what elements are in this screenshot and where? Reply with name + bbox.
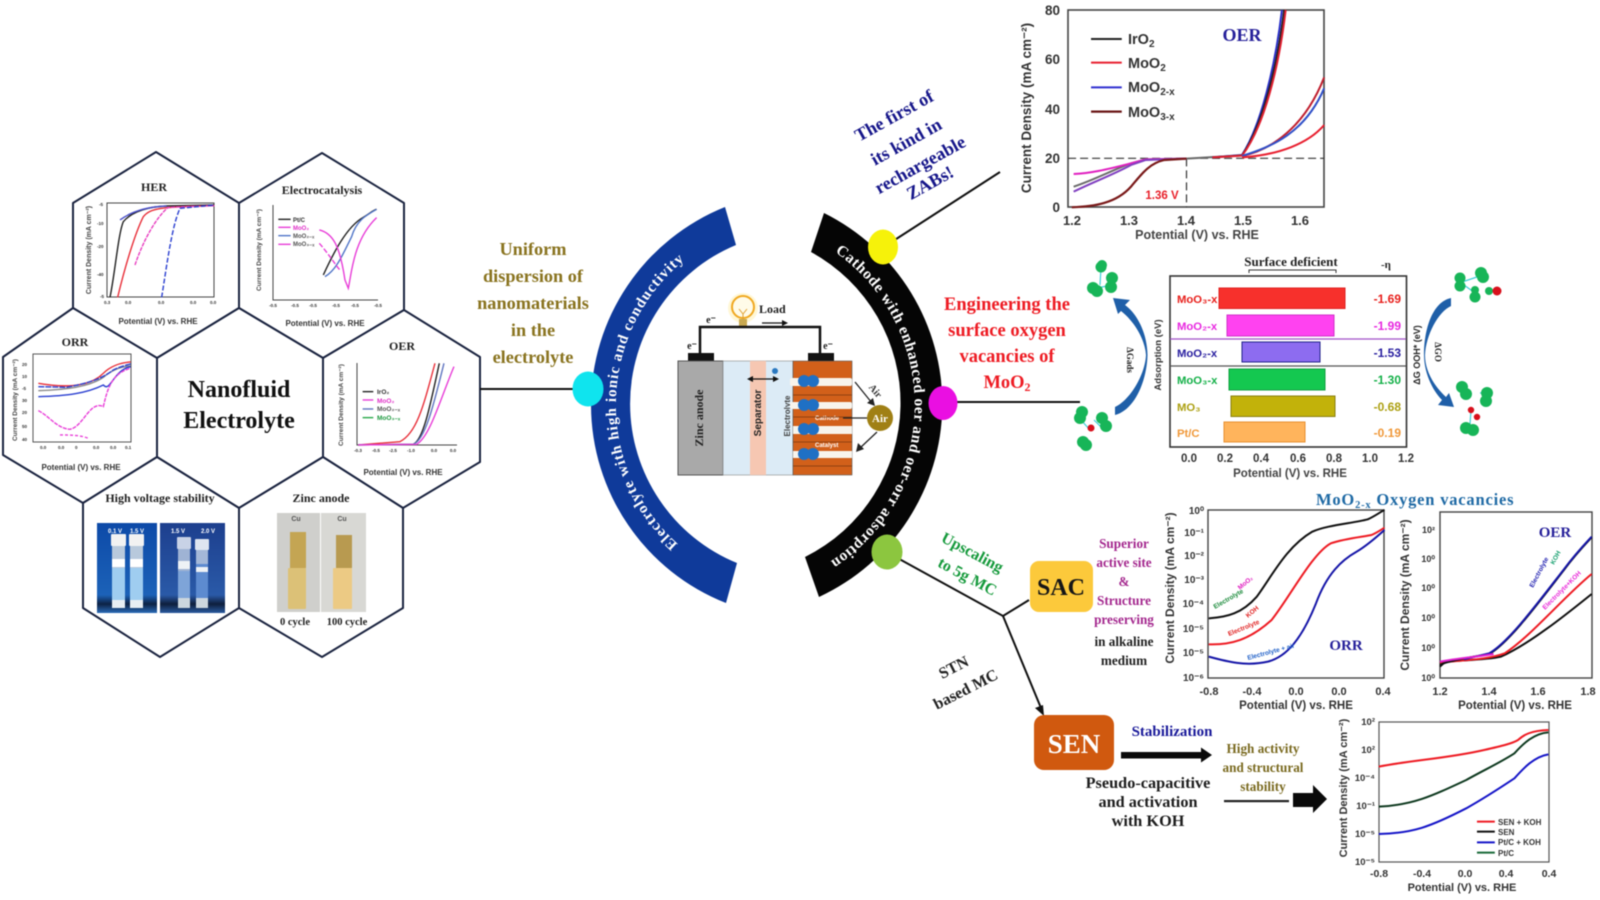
chart: OER main: 1.3 (1120, 213, 1138, 228)
chart: OER main: 1.36 V (1145, 190, 1179, 202)
text: pseudo-capacitive: with KOH (1112, 811, 1185, 830)
chart: SEN polarization: Potential (V) vs. RHE (1408, 882, 1516, 894)
hexagon: OER chart: MoO₃₋ₓ (377, 415, 401, 422)
hexagon: Zinc anode photos (277, 491, 368, 628)
chart: adsorption bar chart: 0.8 (1326, 453, 1343, 465)
hexagon: High voltage stability photos: 1.5 V (171, 529, 185, 535)
arrow: blue curved left (1113, 298, 1148, 415)
text: engineering surface oxygen vacancies: MoO (983, 373, 1025, 393)
text: engineering surface oxygen vacancies: 2 (1025, 380, 1031, 394)
legend: 2-x (1160, 87, 1175, 98)
text: pseudo-capacitive: Pseudo-capacitive (1086, 773, 1210, 792)
hexagon: OER chart: MoO₂ (377, 398, 394, 405)
text: pseudo-capacitive: and activation (1098, 792, 1198, 811)
chart: adsorption bar chart: Potential (V) vs. RHE (1233, 468, 1347, 480)
legend: Pt/C (1498, 849, 1514, 858)
hexagon: OER chart: Potential (V) vs. RHE (363, 468, 443, 477)
hexagon: High voltage stability photos: High voltage stability (105, 491, 215, 505)
legend: Pt/C + KOH (1498, 838, 1541, 847)
chart: OER main: OER (1222, 25, 1262, 45)
hexagon: OER chart: 0.0 (450, 448, 457, 453)
external circuit wire (700, 327, 820, 353)
arrow: SEN to high activity (1121, 748, 1212, 762)
hexagon: Electrocatalysis chart: Potential (V) vs. RHE (285, 319, 365, 328)
text: superior active site: active site (1096, 555, 1152, 570)
hexagon: HER chart: -20 (97, 244, 104, 249)
hexagon: ORR chart: Current Density (mA cm⁻²) (12, 359, 19, 441)
connector lines: green node to SAC and SEN (892, 555, 1044, 716)
chart: adsorption bar chart: -0.68 (1374, 400, 1401, 414)
chart: ORR log: 10⁻¹ (1184, 528, 1205, 539)
text: superior active site: preserving (1094, 612, 1154, 627)
hexagon: HER chart (86, 180, 217, 326)
legend: 3-x (1160, 112, 1175, 123)
hexagon: HER chart: Current Density (mA cm⁻²) (86, 206, 93, 294)
chart: adsorption bar chart: MO₃ (1177, 402, 1200, 414)
hexagon: HER chart: HER (141, 180, 167, 194)
chart: adsorption bar chart: MoO₃-x (1177, 375, 1218, 387)
box: SAC (1030, 561, 1093, 612)
text: uniform dispersion: nanomaterials (477, 293, 589, 313)
text: superior active site (1094, 536, 1154, 668)
hexagon: ORR chart: 20 (22, 362, 28, 367)
hexagon: High voltage stability photos: 1.5 V (130, 529, 144, 535)
chart: SEN polarization: 10² (1361, 717, 1375, 728)
chart: OER log (1398, 512, 1596, 712)
connector line: yellow node to OER chart (890, 172, 1000, 243)
text: pseudo-capacitive (1086, 773, 1210, 830)
hexagon: OER chart: MoO₂₋ₓ (377, 406, 401, 413)
zinc anode (678, 361, 723, 475)
text: high activity: High activity (1227, 741, 1300, 756)
hexagon: Zinc anode photos: 0 cycle (280, 617, 310, 628)
chart: SEN polarization: 0.0 (1458, 868, 1472, 880)
chart: adsorption bar chart: -0.19 (1374, 426, 1401, 440)
center title: Nanofluid Electrolyte (183, 377, 295, 434)
connector line: honeycomb to cyan node (480, 388, 580, 390)
chart: adsorption bar chart: -η (1381, 259, 1391, 271)
legend (1128, 32, 1175, 123)
chart: OER main (1019, 3, 1324, 242)
hexagon: Electrocatalysis chart: Pt/C (293, 218, 306, 224)
hexagon: OER chart: OER (389, 339, 415, 353)
text: high activity (1223, 741, 1304, 794)
chart: SEN polarization: 0.4 (1542, 868, 1556, 880)
chart: adsorption bar chart: MoO₃-x (1177, 294, 1218, 306)
chart: adsorption bar chart: MoO₂-x (1177, 348, 1218, 360)
hexagon: ORR chart: 0.0 (110, 445, 117, 450)
battery schematic (678, 293, 893, 475)
chart: OER main: 1.6 (1291, 213, 1309, 228)
box: SEN: SEN (1048, 729, 1101, 759)
text: first of its kind: ZABs! (903, 162, 957, 204)
arc: electrolyte (blue) (590, 206, 738, 604)
chart: ORR log: 10⁻² (1184, 551, 1205, 562)
chart: OER main: Potential (V) vs. RHE (1135, 228, 1259, 242)
chart: adsorption bar chart: 0.4 (1253, 453, 1270, 465)
legend: MoO (1128, 56, 1160, 72)
chart: ORR log: 10⁻⁵ (1183, 624, 1204, 635)
chart: ORR log: 10⁻⁴ (1183, 599, 1204, 610)
chart: OER log: Potential (V) vs. RHE (1458, 700, 1572, 712)
electron labels: e⁻ (706, 315, 716, 326)
text: engineering surface oxygen vacancies: Engineering the (944, 295, 1070, 315)
text: superior active site: in alkaline (1094, 634, 1154, 649)
text: uniform dispersion (477, 239, 589, 367)
chart: OER log: 10² (1422, 525, 1435, 535)
hexagon: ORR chart: 0.0 (58, 445, 65, 450)
chart: adsorption bar chart (1153, 254, 1414, 480)
chart: ORR log: -0.4 (1243, 686, 1262, 698)
hexagon: High voltage stability photos (97, 491, 225, 613)
text: superior active site: medium (1101, 653, 1147, 668)
chart: OER log: 1.4 (1481, 686, 1498, 698)
text: STN based MC: based MC (931, 667, 1001, 713)
text: engineering surface oxygen vacancies (944, 295, 1070, 394)
chart: ORR log: 10⁻³ (1184, 575, 1205, 586)
air circle and arrows (843, 382, 893, 452)
hexagon: ORR chart: -5 (22, 386, 26, 391)
chart: ORR log: KOH (1245, 605, 1261, 620)
center title: Nanofluid Electrolyte: Nanofluid (188, 377, 291, 403)
hexagon: HER chart: Potential (V) vs. RHE (118, 317, 198, 326)
node: green (872, 534, 902, 570)
hexagon: Electrocatalysis chart: -0.5 (309, 303, 317, 308)
node: magenta (928, 386, 958, 420)
hexagon: Zinc anode photos: Cu (291, 516, 301, 523)
chart: ORR log: MoO₂ (1237, 575, 1255, 592)
arrow: blue curved left: ΔGads (1125, 347, 1135, 373)
hexagon: High voltage stability photos: 2.0 V (201, 529, 215, 535)
box: SEN (1034, 715, 1114, 770)
chart: SEN polarization: Current Density (mA cm⁻²) (1338, 718, 1350, 857)
hexagon: OER chart: -1.0 (407, 448, 415, 453)
node: cyan (572, 372, 604, 406)
hexagon: Electrocatalysis chart: MoO₃₋ₓ (293, 242, 315, 248)
chart: OER main: 80 (1045, 3, 1060, 18)
electron labels: e⁻ (687, 341, 697, 352)
text: engineering surface oxygen vacancies: surface oxygen (948, 321, 1067, 341)
hexagon: Electrocatalysis chart: -0.5 (269, 303, 277, 308)
chart: OER log: 1.6 (1530, 686, 1546, 698)
hexagon: HER chart: 0.0 (158, 300, 165, 305)
chart: adsorption bar chart: 1.0 (1362, 453, 1378, 465)
air circle and arrows: Air (872, 413, 888, 425)
legend: SEN + KOH (1498, 818, 1542, 827)
hexagon: OER chart: 0.0 (431, 448, 438, 453)
chart: ORR log: Electrolyte (1227, 619, 1261, 638)
hexagon: ORR chart: ORR (62, 335, 89, 349)
chart: OER main: 0 (1052, 200, 1060, 215)
hexagon: Zinc anode photos: Zinc anode (292, 491, 350, 505)
hexagon: HER chart: -5 (99, 202, 103, 207)
hexagon: Electrocatalysis chart: -0.5 (351, 303, 359, 308)
chart: ORR log: 10⁻⁵ (1183, 648, 1204, 659)
hexagon: Electrocatalysis chart (256, 183, 382, 328)
legend: 2 (1149, 39, 1155, 50)
arc: cathode (black): Cathode with enhanced oer and oer-orr adsorption (830, 245, 926, 567)
hexagon: High voltage stability photos: 0.1 V (108, 529, 122, 535)
text: uniform dispersion: dispersion of (483, 266, 584, 286)
air cathode (790, 361, 852, 475)
legend: MoO (1128, 80, 1160, 96)
hexagon: ORR chart: Potential (V) vs. RHE (41, 463, 121, 472)
text: STN based MC: STN (936, 653, 972, 683)
zinc anode: Zinc anode (692, 389, 706, 447)
load label (759, 302, 788, 326)
chart: OER main: 60 (1045, 52, 1060, 67)
chart: OER main: 20 (1045, 151, 1060, 166)
chart: ORR log: ORR (1329, 638, 1363, 654)
hexagon: Electrocatalysis chart: MoO₂ (293, 226, 309, 232)
chart: SEN polarization: 0.4 (1499, 868, 1513, 880)
arrow: blue curved right (1412, 298, 1454, 407)
hexagon: HER chart: -40 (97, 272, 104, 277)
chart: SEN polarization: -0.4 (1413, 868, 1431, 880)
chart: ORR log: Current Density (mA cm⁻²) (1163, 512, 1177, 664)
electrolyte chamber and separator: Separator (753, 390, 764, 436)
hexagon: ORR chart: 0.0 (93, 445, 100, 450)
hexagon: HER chart: 0.3 (104, 300, 111, 305)
hexagon: Electrocatalysis chart: Current Density (mA cm⁻²) (256, 209, 263, 291)
text: engineering surface oxygen vacancies: vacancies of (959, 347, 1055, 367)
chart: ORR log: -0.8 (1200, 686, 1218, 698)
molecules: adsorbed species (1074, 260, 1502, 451)
legend: IrO (1128, 32, 1149, 48)
electron labels (687, 315, 833, 352)
chart: OER log: 10⁰ (1421, 673, 1435, 683)
hexagon: Electrocatalysis chart: -0.5 (291, 303, 299, 308)
text: first of its kind (851, 85, 969, 204)
text: first of its kind: The first of (851, 85, 938, 146)
hexagon: HER chart: 0.0 (210, 300, 217, 305)
legend: MoO (1128, 105, 1160, 121)
hexagon: OER chart: -0.3 (354, 448, 362, 453)
chart: OER log: OER (1539, 525, 1571, 541)
text: uniform dispersion: electrolyte (493, 347, 573, 367)
chart: OER log: Current Density (mA cm⁻²) (1398, 519, 1412, 671)
text: superior active site: & (1118, 574, 1130, 589)
chart: adsorption bar chart: Adsorption (eV) (1153, 319, 1164, 391)
heading: MoO2-x oxygen vacancies: 2-x (1355, 500, 1371, 511)
legend: SEN (1498, 828, 1515, 837)
chart: SEN polarization: 10⁻⁵ (1355, 829, 1375, 840)
chart: ORR log: 0.0 (1288, 686, 1304, 698)
node: yellow (868, 230, 898, 264)
chart: adsorption bar chart: 0.2 (1217, 453, 1233, 465)
hexagon: ORR chart: 0.0 (40, 445, 47, 450)
air cathode: Cathode (815, 416, 840, 422)
chart: adsorption bar chart: Surface deficient (1244, 254, 1338, 269)
hexagon: Zinc anode photos: 100 cycle (327, 617, 368, 628)
center title: Nanofluid Electrolyte: Electrolyte (183, 408, 295, 434)
hexagon: HER chart: -10 (97, 221, 104, 226)
legend: 2 (1160, 63, 1166, 74)
hexagon: ORR chart: 30 (22, 398, 28, 403)
text: high activity: and structural (1223, 760, 1304, 775)
chart: ORR log: 0.4 (1375, 686, 1392, 698)
terminals (688, 353, 834, 361)
heading: MoO2-x oxygen vacancies: MoO (1316, 490, 1355, 509)
chart: adsorption bar chart: MoO₂-x (1177, 321, 1218, 333)
legend (1498, 818, 1542, 858)
text: first of its kind: its kind in (867, 114, 945, 169)
chart: ORR log (1163, 506, 1392, 712)
hexagon: Zinc anode photos: Cu (337, 516, 347, 523)
chart: ORR log: Potential (V) vs. RHE (1239, 700, 1353, 712)
hexagon: ORR chart: 50 (22, 424, 28, 429)
chart: OER log: Electrolyte+KOH (1541, 570, 1583, 611)
heading: MoO2-x oxygen vacancies: Oxygen vacancies (1371, 490, 1514, 509)
panel: hexagon honeycomb (3, 152, 480, 657)
text: upscaling to 5g MC (935, 530, 1006, 600)
chart: OER log: 10⁰ (1421, 554, 1435, 564)
text: uniform dispersion: Uniform (499, 239, 567, 259)
chart: OER log: 10⁰ (1421, 643, 1435, 653)
hexagon: Electrocatalysis chart: -0.5 (374, 303, 382, 308)
chart: OER main: 1.4 (1177, 213, 1196, 228)
text: superior active site: Structure (1097, 593, 1151, 608)
hexagon: OER chart: -2.5 (389, 448, 397, 453)
hexagon: OER chart: Current Density (mA cm⁻²) (338, 364, 345, 446)
chart: adsorption bar chart: -1.69 (1374, 292, 1401, 306)
hexagon: ORR chart: 0 (75, 445, 78, 450)
chart: OER log: 1.8 (1580, 686, 1596, 698)
air cathode: Catalyst (815, 443, 838, 449)
chart: OER main: Current Density (mA cm⁻²) (1019, 23, 1034, 193)
hexagon: Electrocatalysis chart: MoO₂₋ₓ (293, 234, 315, 240)
chart: OER log: 10⁰ (1421, 613, 1435, 623)
icon: light bulb (728, 293, 758, 327)
text: high activity: stability (1240, 779, 1286, 794)
hexagon: HER chart: 0.0 (190, 300, 197, 305)
connector line: magenta node to bar chart (950, 401, 1080, 403)
chart: adsorption bar chart: 0.0 (1181, 453, 1197, 465)
text: first of its kind: rechargeable (871, 132, 969, 198)
chart: adsorption bar chart: 1.2 (1398, 453, 1414, 465)
arc: electrolyte (blue): Electrolyte with high ionic and conductivity (604, 254, 684, 552)
air circle and arrows: Air (866, 382, 884, 401)
electrolyte chamber and separator: Electrolyte (783, 395, 792, 436)
chart: OER log: 1.2 (1432, 686, 1448, 698)
arc: cathode (black) (804, 212, 942, 598)
hexagon: HER chart: 0.0 (125, 300, 132, 305)
chart: OER main: 1.2 (1063, 213, 1081, 228)
chart: ORR log: 10⁻⁶ (1183, 673, 1204, 684)
hexagon: HER chart: -5 (100, 294, 104, 299)
arrow: blue curved right: ΔG OOH* (eV) (1412, 325, 1422, 385)
hexagon: ORR chart (12, 335, 132, 472)
text: upscaling to 5g MC: to 5g MC (935, 555, 999, 600)
hexagon: OER chart: -0.5 (372, 448, 380, 453)
box: SAC: SAC (1037, 575, 1085, 601)
electron labels: e⁻ (823, 341, 833, 352)
chart: SEN polarization: 10⁻¹ (1356, 801, 1375, 812)
hexagon: ORR chart: 40 (22, 437, 28, 442)
arrow: toward SEN chart (1224, 785, 1327, 813)
chart: adsorption bar chart: -1.99 (1374, 319, 1401, 333)
hexagon: OER chart (338, 339, 457, 477)
hexagon: Electrocatalysis chart: -0.5 (332, 303, 340, 308)
hexagon: ORR chart: 0.1 (125, 445, 132, 450)
chart: OER main: 1.5 (1234, 213, 1252, 228)
electrolyte chamber and separator (723, 361, 793, 475)
text: superior active site: Superior (1099, 536, 1149, 551)
chart: SEN polarization: 10² (1361, 745, 1375, 756)
chart: ORR log: 0.0 (1331, 686, 1347, 698)
hexagon: Electrocatalysis chart: Electrocatalysis (282, 183, 363, 197)
text: uniform dispersion: in the (511, 320, 555, 340)
chart: adsorption bar chart: -1.30 (1374, 373, 1401, 387)
chart: SEN polarization: 10⁻⁴ (1355, 773, 1375, 784)
chart: OER main: 40 (1045, 102, 1060, 117)
chart: ORR log: 10⁰ (1189, 506, 1204, 517)
chart: adsorption bar chart: Pt/C (1177, 428, 1200, 440)
chart: adsorption bar chart: 0.6 (1290, 453, 1306, 465)
text: stabilization: Stabilization (1132, 724, 1213, 740)
hexagon: OER chart: IrO₂ (377, 389, 389, 396)
chart: OER log: Electrolyte (1529, 556, 1551, 589)
chart: OER log: 10⁰ (1421, 583, 1435, 593)
text: upscaling to 5g MC: Upscaling (938, 530, 1006, 576)
hexagon: ORR chart: 20 (22, 410, 28, 415)
chart: SEN polarization: 10⁻⁵ (1355, 857, 1375, 868)
chart: SEN polarization: -0.8 (1370, 868, 1388, 880)
chart: ORR log: Electrolyte + air (1247, 642, 1296, 662)
arrow: blue curved right: ΔGO (1433, 342, 1443, 362)
chart: SEN polarization (1338, 717, 1556, 894)
hexagon: ORR chart: 10 (22, 374, 28, 379)
chart: ORR log: Electrolyte (1212, 588, 1245, 611)
chart: adsorption bar chart: -1.53 (1374, 346, 1401, 360)
chart: OER log: KOH (1550, 550, 1563, 566)
load label: Load (759, 302, 786, 316)
